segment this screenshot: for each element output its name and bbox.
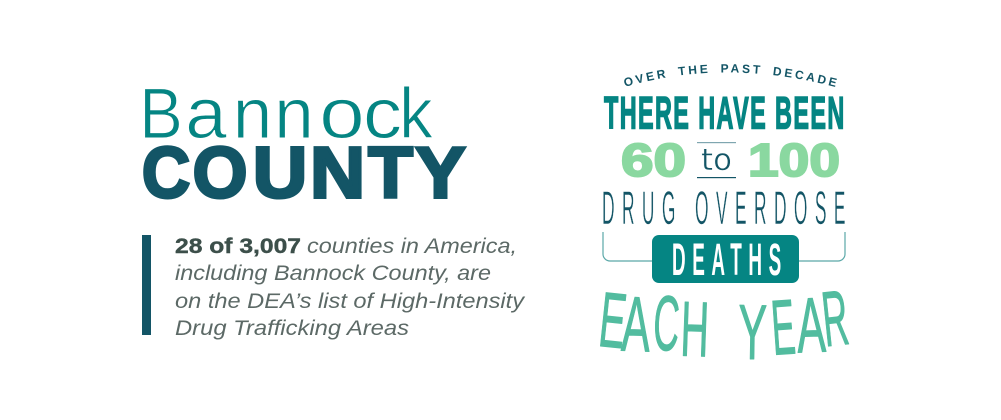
heading: Bannock: n: [233, 75, 272, 154]
heading: each year, hand-lettered: H: [679, 286, 711, 374]
heading: COUNTY: [142, 132, 466, 214]
text block: DEA fact: including Bannock County, are: [175, 261, 491, 285]
curved text: over the past decade: OVER THE PAST DECADE: [624, 64, 837, 87]
bracket around deaths: [603, 232, 845, 261]
heading: drug overdose: DRUG OVERDOSE: [602, 182, 845, 235]
heading: each year, hand-lettered: A: [795, 282, 827, 370]
heading: Bannock: B: [139, 75, 183, 154]
heading: COUNTY: U: [253, 132, 307, 213]
heading: Bannock: c: [363, 73, 402, 153]
heading: COUNTY: Y: [415, 132, 466, 213]
heading: each year, hand-lettered: A: [620, 281, 652, 369]
heading: COUNTY: N: [310, 132, 365, 213]
heading: Bannock: a: [185, 75, 227, 154]
number: 60: 60: [621, 134, 686, 186]
heading: each year, hand-lettered: [595, 273, 852, 377]
text block: DEA fact: counties in America,: [307, 234, 517, 258]
heading: Bannock: o: [319, 75, 365, 154]
panel: left county heading and fact: [139, 73, 525, 340]
heading: COUNTY: C: [142, 132, 190, 213]
heading: there have been: THERE HAVE BEEN: [604, 88, 844, 139]
heading: COUNTY: O: [193, 133, 247, 214]
panel: right overdose statistic: [595, 64, 852, 377]
heading: Bannock: k: [399, 73, 433, 153]
text block: DEA fact: Drug Trafficking Areas: [175, 316, 409, 340]
text block: DEA fact: on the DEA’s list of High-Intensity: [175, 289, 525, 313]
heading: each year, hand-lettered: R: [818, 273, 852, 363]
heading: COUNTY: T: [368, 133, 413, 213]
heading: each year, hand-lettered: E: [768, 282, 798, 372]
heading: each year, hand-lettered: E: [595, 276, 630, 366]
heading: each year, hand-lettered: C: [651, 279, 682, 367]
text block: DEA fact: [175, 234, 525, 340]
heading: each year, hand-lettered: Y: [737, 289, 768, 377]
text block: DEA fact: 28 of 3,007: [175, 234, 301, 258]
heading: Bannock: [139, 73, 433, 154]
heading: Bannock: n: [274, 75, 314, 154]
badge: deaths: DEATHS: [672, 236, 781, 285]
number: 100: 100: [748, 134, 840, 186]
label: to, between two rules: to: [701, 143, 732, 178]
accent bar: [142, 235, 151, 335]
